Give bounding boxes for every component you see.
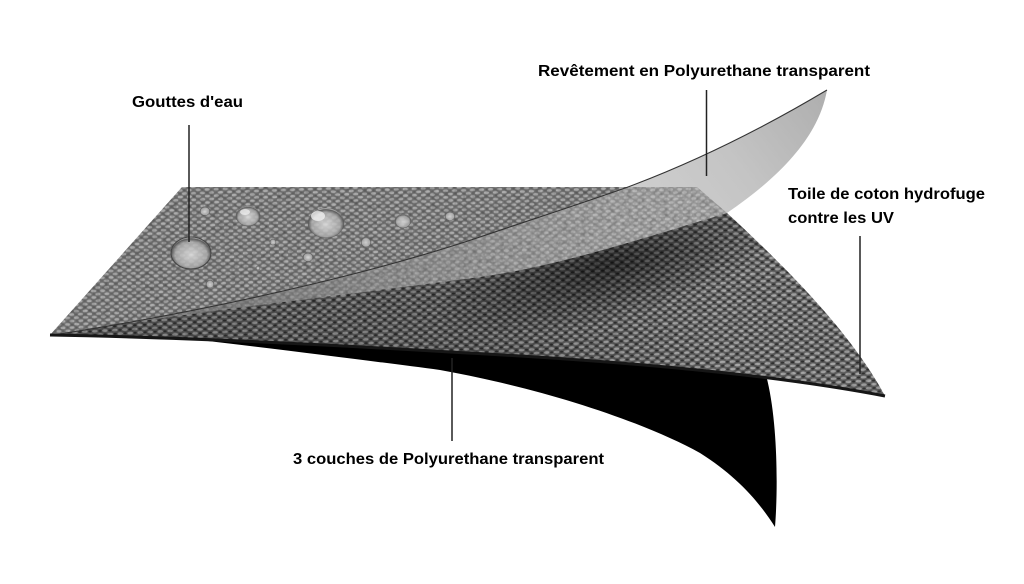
leader line: toile de coton	[859, 236, 861, 374]
shading on peeled fabric	[50, 213, 885, 396]
fold shadow	[50, 213, 885, 396]
fabric dark edge	[50, 335, 885, 396]
label: revetement en polyurethane: Revêtement en Polyurethane transparent	[538, 63, 870, 80]
label: contre les UV: contre les UV	[788, 210, 895, 227]
film top edge	[60, 90, 827, 334]
fabric top face	[50, 187, 628, 335]
fabric grain noise	[50, 187, 885, 396]
label: toile de coton: Toile de coton hydrofuge	[788, 186, 985, 203]
fabric peeled area	[50, 213, 885, 396]
leader line: revetement	[706, 90, 708, 176]
transparent polyurethane film	[60, 90, 827, 334]
leader line: 3 couches	[451, 358, 453, 441]
fabric seen through film	[129, 187, 726, 323]
label: 3 couches: 3 couches de Polyurethane transparent	[293, 451, 604, 468]
black polyurethane underlayer	[200, 340, 777, 527]
leader line: Gouttes d'eau	[188, 125, 190, 242]
water droplets	[171, 206, 455, 288]
label: Gouttes d'eau: Gouttes d'eau	[132, 94, 243, 111]
infographic: layered waterproof fabric diagram	[50, 64, 984, 527]
